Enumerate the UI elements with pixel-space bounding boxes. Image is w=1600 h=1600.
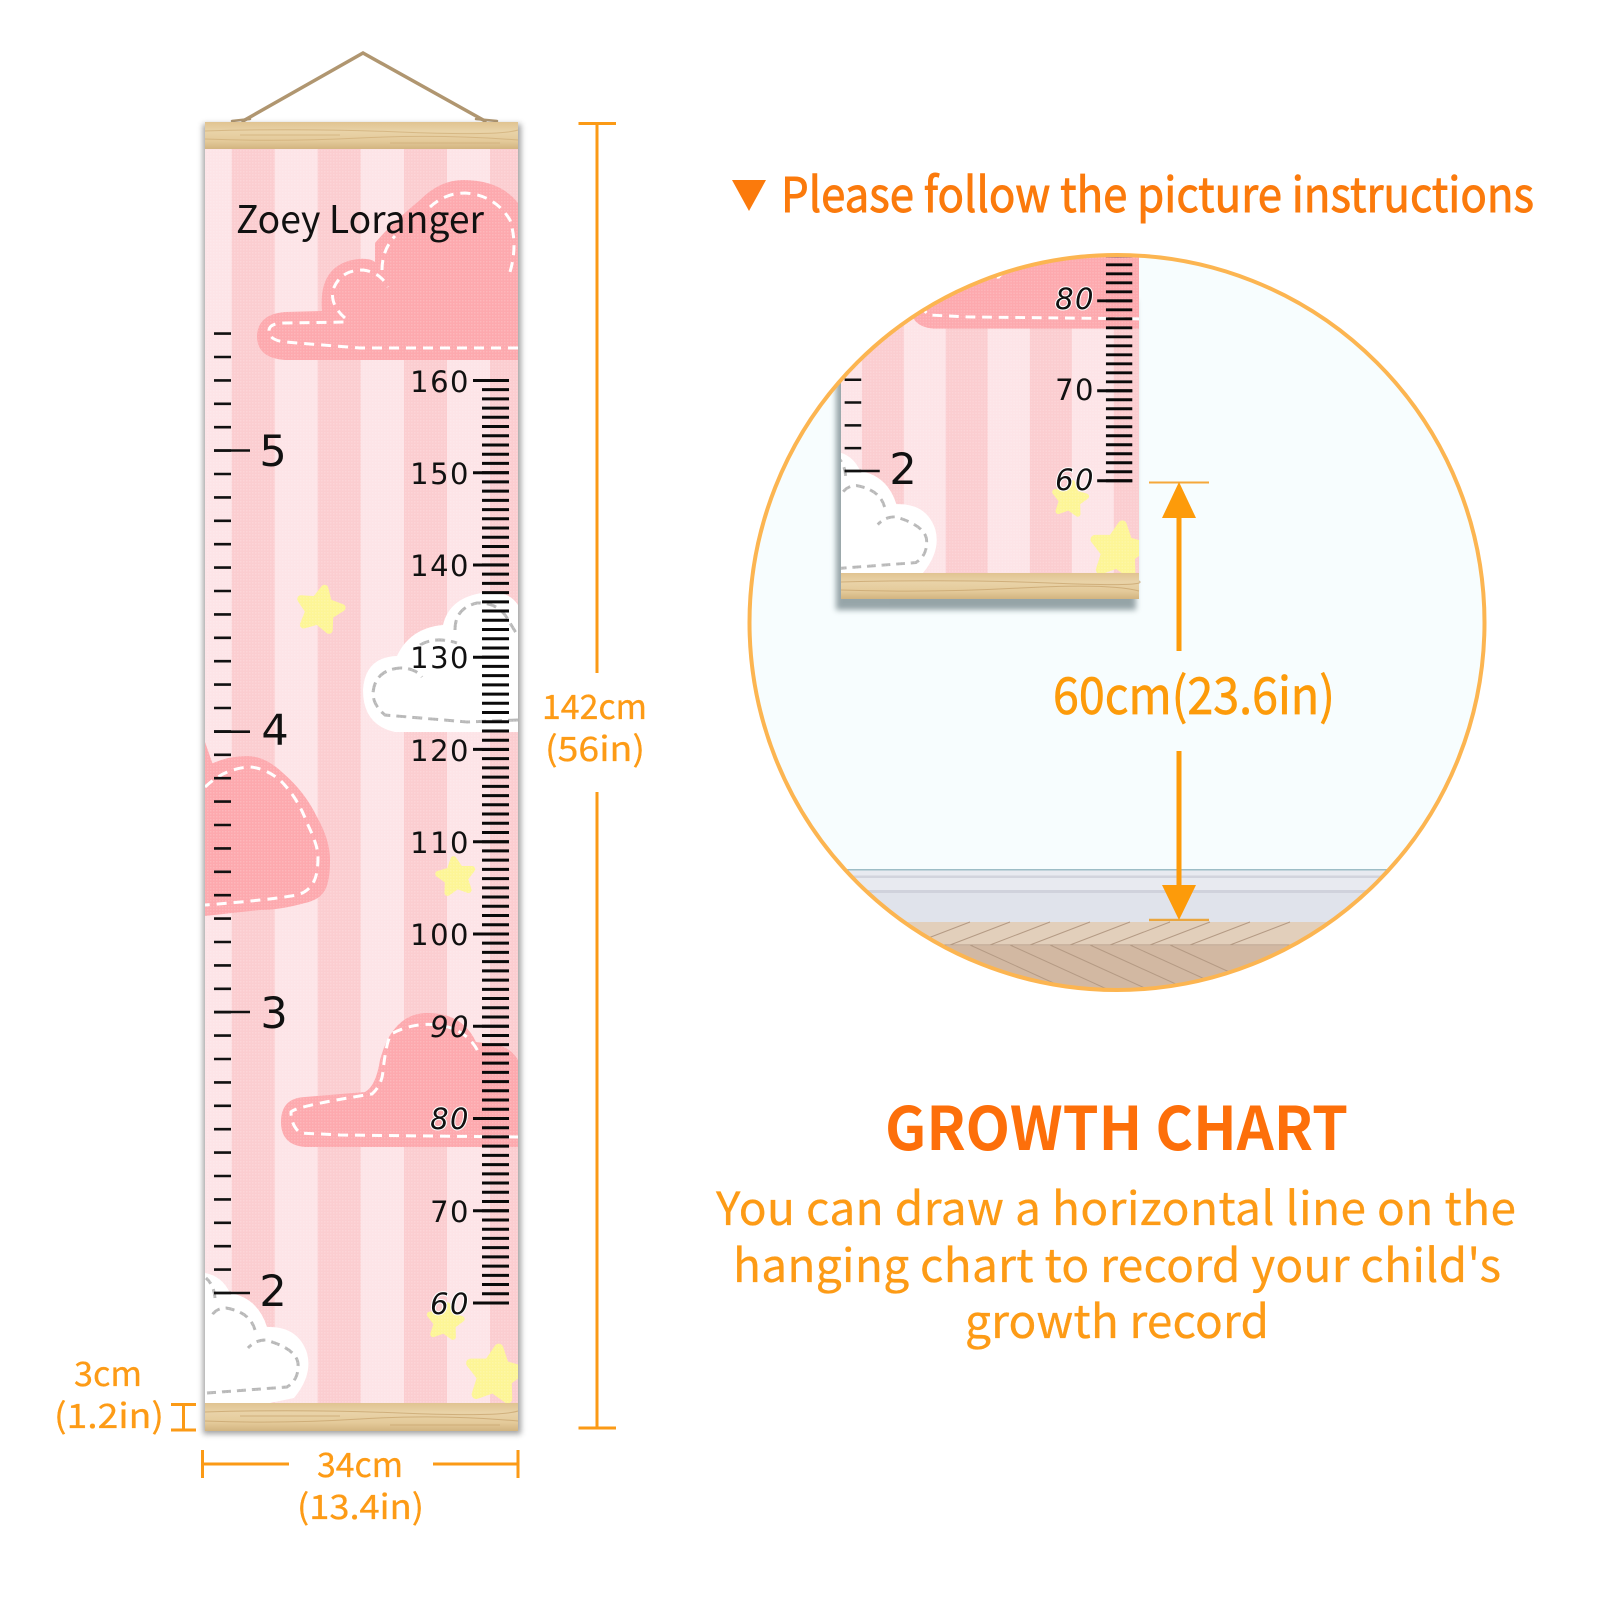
- centimetre labels: 110: [410, 826, 470, 860]
- centimetre labels: 120: [410, 734, 470, 768]
- small chart labels: 60: [1055, 463, 1095, 497]
- panel: hanging growth chart: [203, 122, 524, 1434]
- dimension: width 34cm: (13.4in): [297, 1480, 424, 1529]
- hanging rope: [232, 53, 497, 121]
- small chart on the wall: [832, 257, 1141, 614]
- circle outline: [750, 255, 1484, 990]
- panel: wall installation circle: [748, 253, 1486, 992]
- small chart labels: [889, 282, 1095, 497]
- dimension: width 34cm: 34cm: [317, 1438, 403, 1487]
- inch labels: 5: [259, 427, 287, 477]
- dimension: height 142cm: (56in): [545, 722, 645, 771]
- inch ruler ticks: [214, 331, 250, 1294]
- dimension: height 142cm: [542, 124, 647, 1428]
- description text: growth record: [965, 1286, 1269, 1352]
- centimetre labels: 150: [410, 457, 470, 491]
- arrow: lower measure: [1149, 751, 1209, 920]
- dimension: width 34cm: [202, 1438, 518, 1529]
- centimetre labels: 140: [410, 549, 470, 583]
- lower pink cloud: [281, 1013, 518, 1147]
- dimension: bar 3cm: 3cm: [74, 1347, 142, 1396]
- centimetre labels: 90: [430, 1010, 470, 1044]
- top wooden bar: [205, 122, 518, 149]
- description text: hanging chart to record your child's: [733, 1230, 1501, 1296]
- centimetre ruler ticks: [473, 379, 509, 1304]
- centimetre labels: 80: [430, 1102, 470, 1136]
- chart artwork: [205, 149, 524, 1403]
- measurement label: 60cm(23.6in): [1053, 655, 1335, 729]
- centimetre labels: 130: [410, 641, 470, 675]
- canvas weave texture: [205, 149, 518, 1403]
- chart shadow: [203, 124, 521, 1434]
- description text: You can draw a horizontal line on the: [715, 1173, 1516, 1239]
- white cloud: [363, 592, 518, 732]
- stars: [296, 584, 524, 1400]
- small chart labels: 80: [1055, 282, 1095, 316]
- centimetre labels: [410, 365, 470, 1321]
- dimension: bar 3cm: [54, 1347, 196, 1438]
- inch labels: [259, 427, 289, 1317]
- small chart artwork: [841, 257, 1139, 573]
- dimension: height 142cm: 142cm: [542, 680, 647, 729]
- centimetre labels: 60: [430, 1287, 470, 1321]
- centimetre labels: 160: [410, 365, 470, 399]
- small chart wooden bar: [841, 573, 1140, 599]
- bottom wooden bar: [205, 1403, 518, 1431]
- inch labels: 3: [260, 989, 288, 1039]
- arrow: upper measure: [1149, 482, 1209, 651]
- inch labels: 4: [261, 706, 289, 756]
- icon: down triangle: [732, 180, 766, 211]
- instruction heading: Please follow the picture instructions: [781, 156, 1534, 226]
- small chart labels: 2: [889, 445, 917, 495]
- striped canvas background: [205, 149, 518, 1403]
- inch labels: 2: [259, 1267, 287, 1317]
- name text: Zoey Loranger: [236, 189, 484, 244]
- centimetre labels: 100: [410, 918, 470, 952]
- small chart labels: 70: [1055, 373, 1095, 407]
- middle pink cloud: [205, 742, 330, 916]
- skirting board and floor: [847, 869, 1387, 988]
- top pink cloud: [257, 180, 518, 360]
- description text: [715, 1173, 1516, 1352]
- dimension: bar 3cm: (1.2in): [54, 1389, 164, 1438]
- centimetre labels: 70: [430, 1195, 470, 1229]
- title: GROWTH CHART: [885, 1081, 1348, 1168]
- wall background: [750, 255, 1484, 990]
- small chart shadow: [836, 300, 1136, 610]
- bottom white cloud: [205, 1273, 308, 1403]
